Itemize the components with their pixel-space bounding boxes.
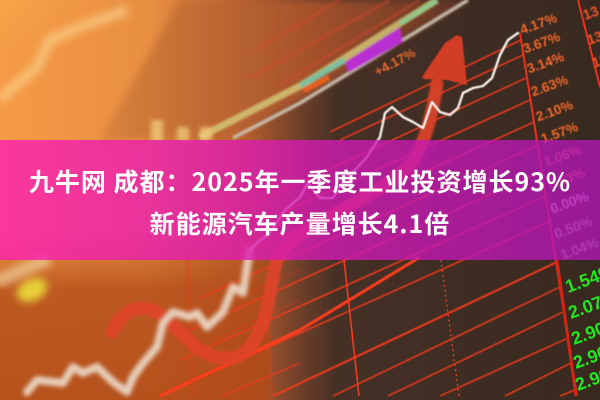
percentage axis labels: orange: 0.53%: [546, 165, 587, 192]
pale streak: [0, 258, 50, 282]
percentage axis labels: orange: 4.17%: [518, 10, 559, 37]
percentage axis labels: white and grey: 0.00%: [548, 188, 591, 217]
percentage axis labels: orange: 1.06%: [542, 142, 583, 169]
percentage axis labels: orange: 3.14%: [525, 49, 566, 76]
percentage axis labels: orange: [518, 10, 587, 192]
ticker band with coloured cells: [200, 0, 468, 138]
percentage axis labels: green: [566, 268, 600, 391]
yellow glow top-left: [0, 0, 170, 120]
percentage axis labels: white and grey: 1.04%: [558, 234, 600, 263]
percentage axis labels: orange: 2.10%: [534, 97, 575, 124]
headline text: [29, 163, 571, 241]
percentage axis labels: white and grey: [548, 188, 600, 263]
darker lower-left tone: [0, 230, 270, 400]
headline text: 九牛网 成都：2025年一季度工业投资增长93%: [29, 163, 571, 199]
blurred top-left white line: [0, 10, 127, 100]
yellow light spot: [13, 273, 51, 307]
upper orange-brown area above the ticker band: [100, 0, 470, 140]
grid lines sloping to the right: [160, 40, 575, 396]
white price line: [27, 33, 518, 392]
percentage axis labels: orange: 1.57%: [539, 119, 580, 146]
percentage axis labels: orange: 3.67%: [521, 29, 562, 56]
blurred bars on the left of the band: [151, 120, 212, 142]
percentage axis labels: white and grey: 0.50%: [552, 213, 595, 242]
far-right cropped numbers: [582, 6, 600, 68]
reddish stripes above the band: [250, 0, 420, 85]
red rising arrow: [112, 35, 467, 358]
headline text: 新能源汽车产量增长4.1倍: [150, 205, 450, 241]
small rate label on chart: +4.17%: [372, 45, 418, 79]
vertical grid lines: [188, 0, 600, 396]
magenta title banner: [0, 140, 600, 260]
percentage axis labels: orange: 2.63%: [529, 72, 570, 99]
